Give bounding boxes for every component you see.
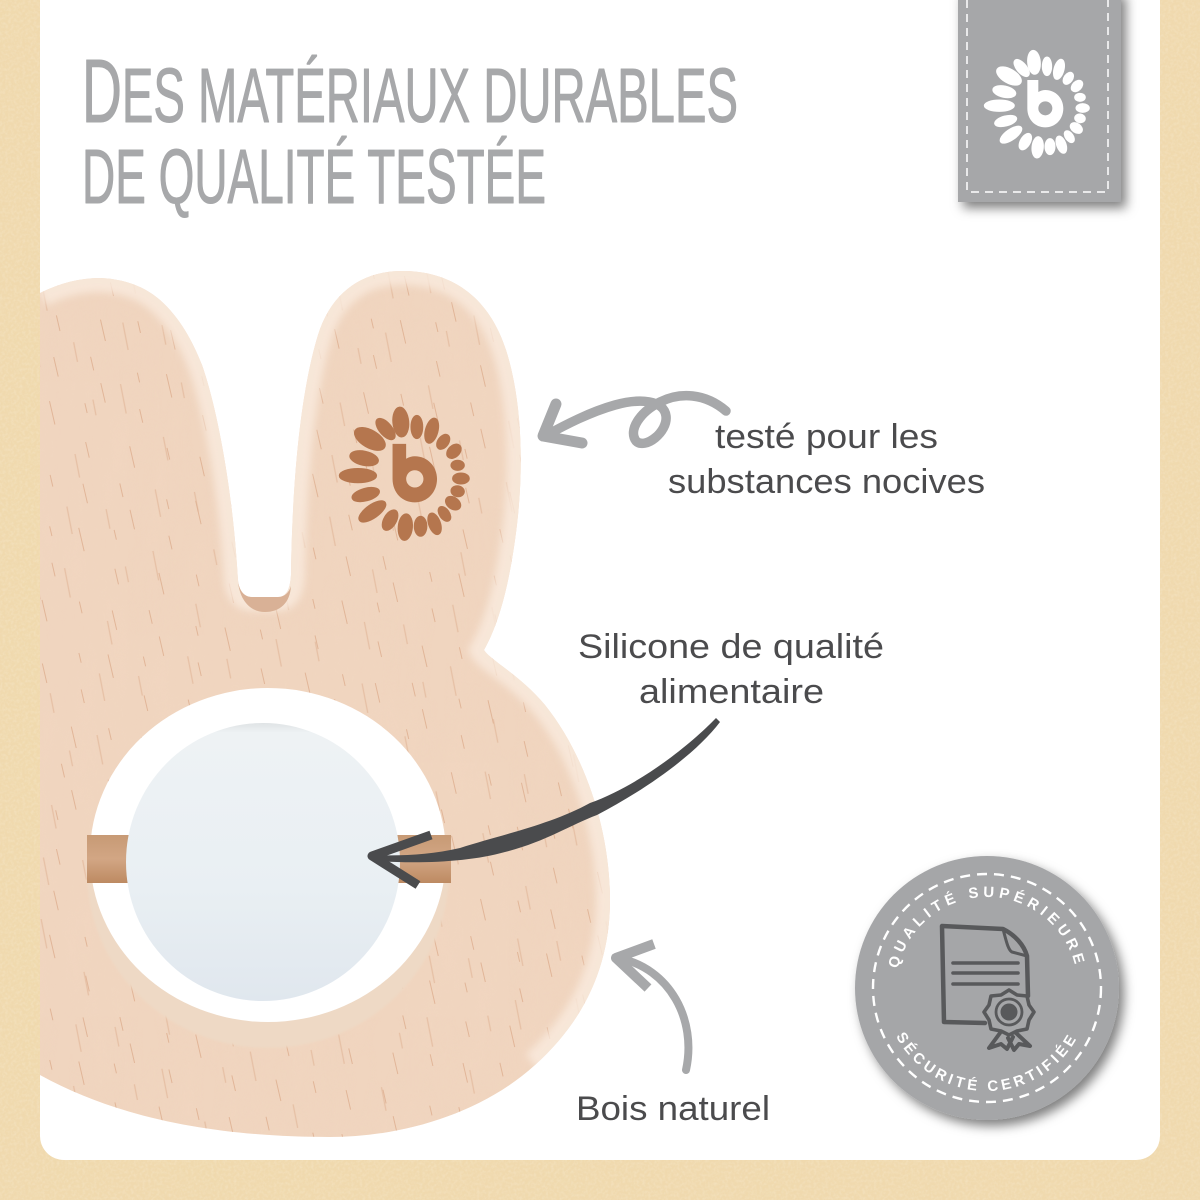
text: silicone: alimentaire (639, 673, 824, 711)
seal text: SÉCURITÉ CERTIFIÉE (897, 1032, 1076, 1091)
hole opening (90, 688, 446, 1022)
slot inner edge (238, 582, 291, 612)
title: DE QUALITÉ TESTÉE (82, 134, 546, 220)
seal text (889, 886, 1085, 1091)
title: DES MATÉRIAUX DURABLES (82, 42, 738, 142)
silicone ball (126, 723, 400, 1001)
icon: brand logo (985, 50, 1089, 158)
title (82, 42, 738, 220)
arrow: natural wood (616, 944, 688, 1070)
engraved logo (340, 407, 469, 540)
text: harmful substances: substances nocives (668, 463, 985, 501)
seal text: QUALITÉ SUPÉRIEURE (889, 886, 1085, 968)
brand tag (958, 0, 1121, 202)
hole inner wall (87, 696, 449, 1048)
icon: certificate (942, 926, 1034, 1050)
text: harmful substances (668, 418, 985, 501)
rabbit body (30, 260, 630, 1150)
wooden dowel (87, 835, 451, 883)
quality seal (852, 854, 1132, 1134)
text: natural wood: Bois naturel (576, 1090, 770, 1128)
text: harmful substances: testé pour les (715, 418, 938, 456)
arrow: harmful substances (543, 396, 726, 443)
text: silicone: Silicone de qualité (578, 628, 884, 666)
text: silicone (578, 628, 884, 711)
arrow: silicone (372, 718, 720, 885)
wooden rabbit teether (30, 260, 630, 1150)
